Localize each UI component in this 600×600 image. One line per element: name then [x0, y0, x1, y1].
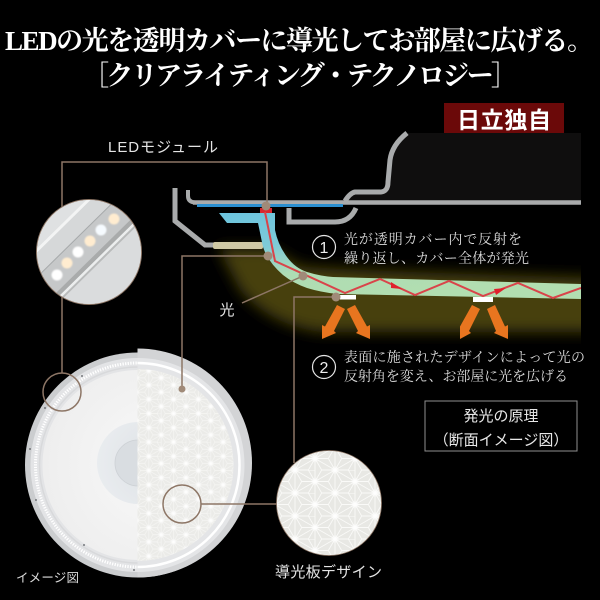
callout: LED module magnified [36, 199, 142, 305]
step 2 explanation: 表面に施されたデザインによって光の [344, 349, 585, 366]
glow of emitted light [218, 248, 600, 332]
magnifier circles and dots [43, 202, 340, 523]
label: light: 光 [219, 302, 235, 319]
badge: Hitachi original: 日立独自 [457, 107, 551, 133]
step 1 explanation: 1 [320, 240, 329, 257]
patterned right half [138, 348, 252, 578]
step 2 explanation [312, 349, 585, 385]
fixture outline [175, 133, 581, 245]
caption: image figure: イメージ図 [16, 571, 79, 585]
LED chips [52, 214, 120, 280]
step 1 explanation: 繰り返し、カバー全体が発光 [344, 250, 529, 267]
title: LEDの光を透明カバーに導光してお部屋に広げる。 [5, 26, 594, 56]
title: ［クリアライティング・テクノロジー］ [82, 61, 518, 91]
step 2 explanation: 反射角を変え、お部屋に光を広げる [344, 368, 568, 385]
badge: Hitachi original [444, 103, 564, 137]
reflector strip [213, 242, 263, 249]
callout: light guide design magnified [276, 450, 382, 556]
caption box: principle of light emission [425, 401, 577, 451]
label: LED module: LEDモジュール [108, 139, 218, 156]
orange output arrows [322, 305, 508, 339]
caption: light guide design: 導光板デザイン [275, 563, 382, 581]
step 2 explanation: 2 [320, 360, 329, 377]
caption box: principle of light emission: 発光の原理 [463, 408, 539, 425]
light guide cover [219, 213, 581, 299]
step 1 explanation [312, 231, 529, 267]
reflecting light ray [265, 212, 581, 298]
caption box: principle of light emission: （断面イメージ図） [434, 432, 568, 449]
cross-section diagram [175, 133, 600, 339]
fixture dark body [345, 133, 581, 202]
LED blue board [197, 204, 343, 207]
step 1 explanation: 光が透明カバー内で反射を [344, 231, 522, 248]
LED chip [260, 208, 272, 213]
connector lines [62, 162, 336, 504]
screws [29, 375, 135, 571]
title [5, 26, 594, 91]
design dots on surface [340, 295, 493, 302]
ceiling light photo [23, 348, 252, 578]
